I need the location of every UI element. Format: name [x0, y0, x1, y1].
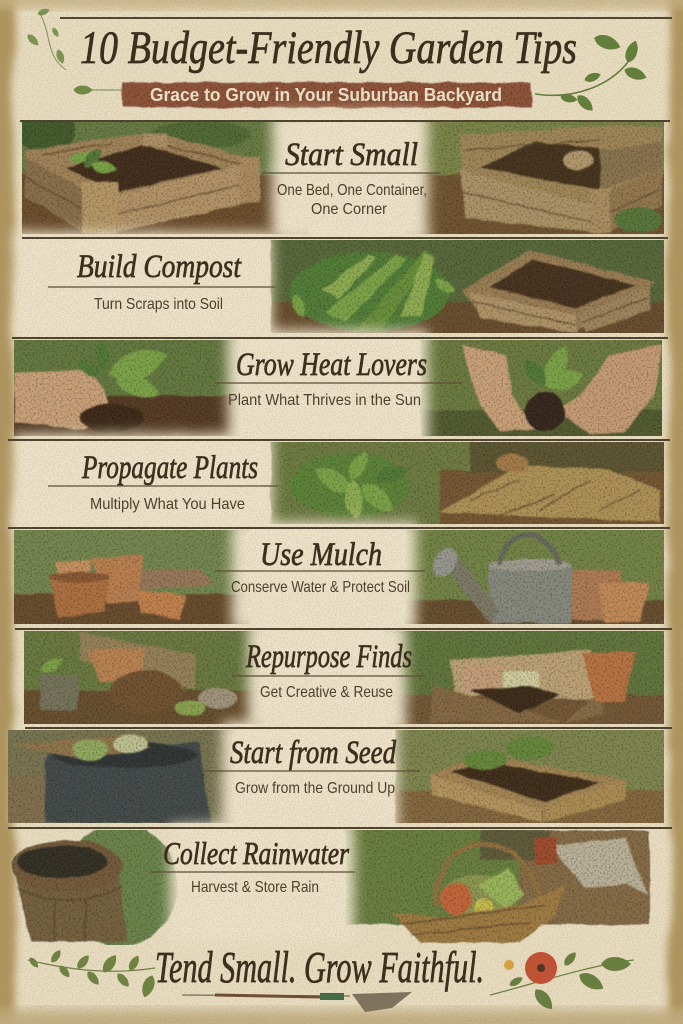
icon: vine top left [26, 7, 66, 70]
text background [14, 232, 272, 340]
image: okra and compost box [269, 240, 664, 333]
subtext: Harvest & Store Rain [191, 879, 319, 896]
icon: vine right [535, 33, 647, 113]
panel: Build Compost [14, 232, 670, 340]
image: harvest basket [345, 825, 650, 943]
image: seedlings in bed [395, 725, 670, 826]
text background [14, 434, 272, 532]
image: raised bed left [22, 122, 309, 234]
text background [248, 622, 406, 730]
heading: Start Small [285, 137, 418, 173]
subtext: Multiply What You Have [90, 496, 245, 513]
icon: trowel [182, 992, 412, 1012]
subtitle ribbon: Grace to Grow in Your Suburban Backyard [150, 85, 502, 105]
panel: Collect Rainwater [10, 823, 650, 947]
image: watering can [405, 530, 664, 624]
panel dividers [8, 121, 672, 828]
subtext: Plant What Thrives in the Sun [228, 392, 421, 409]
text background [228, 330, 428, 444]
subtext: Turn Scraps into Soil [94, 296, 223, 313]
panel: Use Mulch [5, 522, 670, 630]
subtext: Conserve Water & Protect Soil [231, 579, 410, 596]
panel: Repurpose Finds [15, 622, 670, 730]
text background [272, 112, 428, 242]
panel: Start from Seed [0, 722, 670, 830]
icon: olive branch [28, 949, 157, 998]
image: wooden barrel [10, 823, 178, 947]
text background [170, 824, 354, 942]
images [14, 530, 664, 624]
image: pots and old boards [24, 631, 264, 724]
image: rain barrel [8, 730, 235, 823]
subtitle ribbon [122, 82, 532, 108]
header [26, 7, 672, 113]
images [22, 122, 664, 234]
image: mulch and plant [269, 442, 664, 524]
panel: Grow Heat Lovers [5, 330, 670, 444]
heading: Start from Seed [230, 735, 396, 771]
images [0, 725, 670, 826]
panel: Propagate Plants [14, 434, 670, 532]
footer text: Tend Small. Grow Faithful. [155, 943, 484, 992]
images [24, 631, 664, 724]
heading: Repurpose Finds [245, 639, 412, 675]
icon: flower sprig [490, 950, 634, 1012]
heading: Build Compost [77, 249, 242, 285]
image: hands planting right [420, 340, 662, 436]
footer [28, 943, 634, 1012]
subtext: One Bed, One Container, [277, 182, 427, 199]
heading: Propagate Plants [81, 450, 258, 486]
icon: leaf left of ribbon [74, 86, 122, 94]
subtext: Grow from the Ground Up [235, 780, 395, 797]
subtext line 2: One Corner [311, 201, 388, 218]
heading: Collect Rainwater [163, 835, 349, 871]
image: hands planting left [14, 340, 240, 436]
title: 10 Budget-Friendly Garden Tips [80, 22, 577, 74]
subtext: Get Creative & Reuse [260, 684, 393, 701]
text background [232, 522, 416, 630]
image: seed packets in crate [386, 631, 664, 724]
image: compost bin right [405, 122, 664, 234]
panel: Start Small [10, 108, 670, 245]
heading: Grow Heat Lovers [236, 347, 427, 383]
text background [222, 722, 398, 830]
heading: Use Mulch [260, 537, 382, 573]
images [14, 340, 662, 436]
images [10, 823, 650, 947]
image: terracotta pots [14, 530, 250, 624]
